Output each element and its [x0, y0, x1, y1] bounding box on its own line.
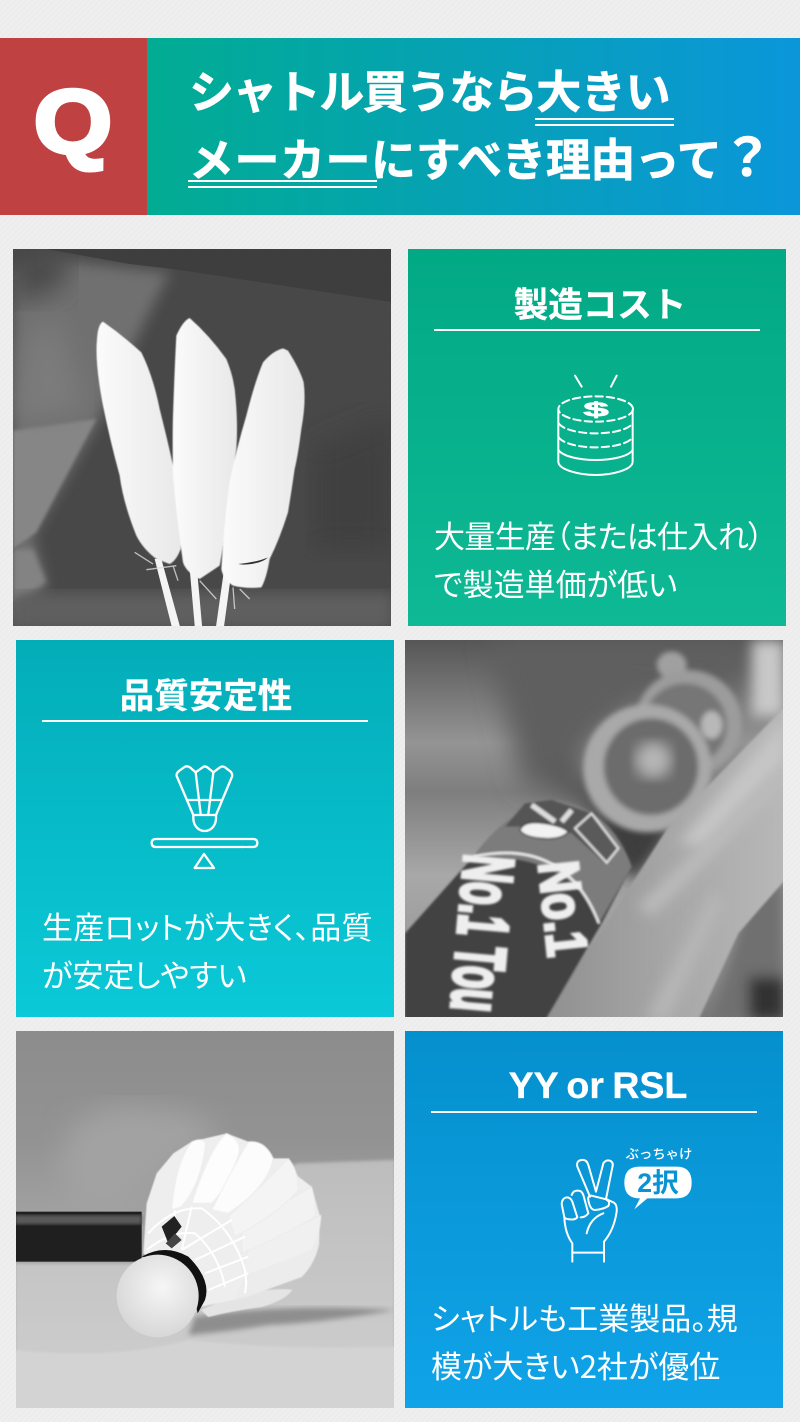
heading rule	[434, 329, 760, 331]
card: 品質安定性	[16, 640, 394, 1017]
card: YY or RSL	[405, 1031, 783, 1408]
icon: coin stack: $	[583, 398, 609, 421]
icon: coin stack	[557, 374, 634, 476]
body text: が安定しやすい	[42, 951, 247, 996]
body text	[42, 903, 373, 996]
title line 1: シャトル買うなら大きい	[189, 56, 670, 121]
underline: メーカー	[188, 180, 377, 188]
body text: 大量生産（または仕入れ）	[434, 512, 763, 557]
body text: で製造単価が低い	[434, 560, 677, 605]
heading: 品質安定性	[120, 668, 292, 718]
heading: 製造コスト	[514, 277, 686, 327]
card: 製造コスト	[408, 249, 786, 626]
feathers	[143, 1133, 321, 1317]
icon: shuttlecock on balance	[150, 765, 258, 870]
title line 2: メーカーにすべき理由って？	[189, 116, 773, 191]
heading: YY or RSL	[509, 1064, 687, 1106]
shadow	[188, 1308, 395, 1335]
body text	[434, 512, 763, 605]
header banner	[0, 38, 800, 215]
photo: shuttle tubes: No.1 Tou	[435, 852, 527, 1015]
heading rule	[42, 720, 368, 722]
icon: peace sign hand with speech bubble	[560, 1144, 692, 1263]
photo: shuttle tubes: No.1	[526, 858, 600, 959]
body text: 生産ロットが大きく、品質	[42, 903, 373, 948]
Q badge: Q	[34, 73, 113, 173]
body text: 模が大きい2社が優位	[431, 1342, 720, 1387]
quills	[155, 559, 231, 629]
photo: shuttle tubes	[405, 640, 783, 1017]
icon: peace sign hand with speech bubble: 2択	[637, 1168, 679, 1198]
photo: white feathers	[13, 249, 391, 626]
photo: shuttlecock	[16, 1031, 394, 1408]
Q badge	[0, 38, 147, 215]
heading rule	[431, 1111, 757, 1113]
body text: シャトルも工業製品。規	[431, 1294, 738, 1339]
underline: 大きい	[535, 118, 674, 126]
body text	[431, 1294, 738, 1387]
cork	[142, 1250, 206, 1313]
icon: peace sign hand with speech bubble: ぶっちゃけ	[626, 1144, 692, 1163]
tube	[405, 800, 632, 1020]
